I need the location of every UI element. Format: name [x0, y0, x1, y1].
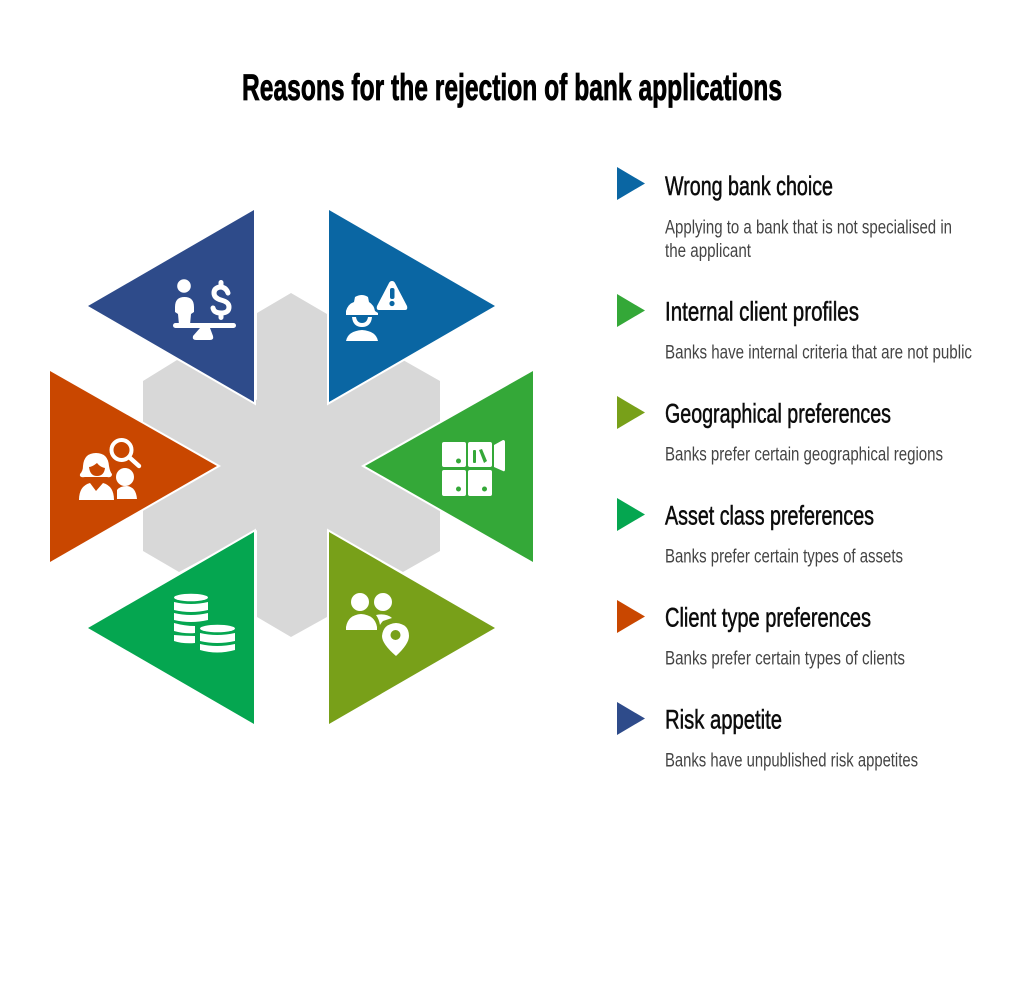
- hexagonal diagram: [50, 210, 533, 724]
- icon: worker with warning sign: [346, 281, 407, 341]
- icon: people with location pin: [346, 593, 409, 656]
- legend item: wrong bank choice: [617, 167, 952, 262]
- legend item: client type preferences: [617, 600, 905, 670]
- icon: people with magnifier: [79, 440, 139, 500]
- legend item: client type preferences: Banks prefer certain types of clients: [665, 648, 905, 670]
- grey central star: [143, 293, 440, 637]
- segment: risk appetite: [88, 210, 254, 402]
- icon: person and dollar on scale: [173, 279, 236, 340]
- legend item: geographical preferences: [617, 396, 943, 466]
- legend item: risk appetite: Banks have unpublished risk appetites: [665, 750, 918, 772]
- segment: asset class preferences: [88, 532, 254, 724]
- legend item: internal client profiles: [617, 294, 972, 364]
- icon: coin stacks: [174, 594, 235, 652]
- legend item: client type preferences: Client type preferences: [665, 602, 871, 632]
- legend item: geographical preferences: Geographical preferences: [665, 398, 891, 428]
- legend item: risk appetite: [617, 702, 918, 772]
- legend item: wrong bank choice: Applying to a bank that is not specialised in: [665, 218, 952, 238]
- legend item: geographical preferences: Banks prefer certain geographical regions: [665, 444, 943, 466]
- segment: client type preferences: [50, 371, 217, 562]
- legend item: wrong bank choice: Wrong bank choice: [665, 171, 833, 201]
- legend item: asset class preferences: [617, 498, 903, 568]
- legend item: asset class preferences: Banks prefer certain types of assets: [665, 546, 903, 568]
- segment: wrong bank choice: [329, 210, 495, 402]
- segment: geographical preferences: [329, 532, 495, 724]
- legend item: wrong bank choice: the applicant: [665, 241, 752, 262]
- legend item: internal client profiles: Internal client profiles: [665, 296, 859, 326]
- legend item: risk appetite: Risk appetite: [665, 704, 782, 734]
- legend item: asset class preferences: Asset class preferences: [665, 500, 874, 530]
- icon: lockers: [442, 440, 505, 496]
- segment: internal client profiles: [365, 371, 533, 562]
